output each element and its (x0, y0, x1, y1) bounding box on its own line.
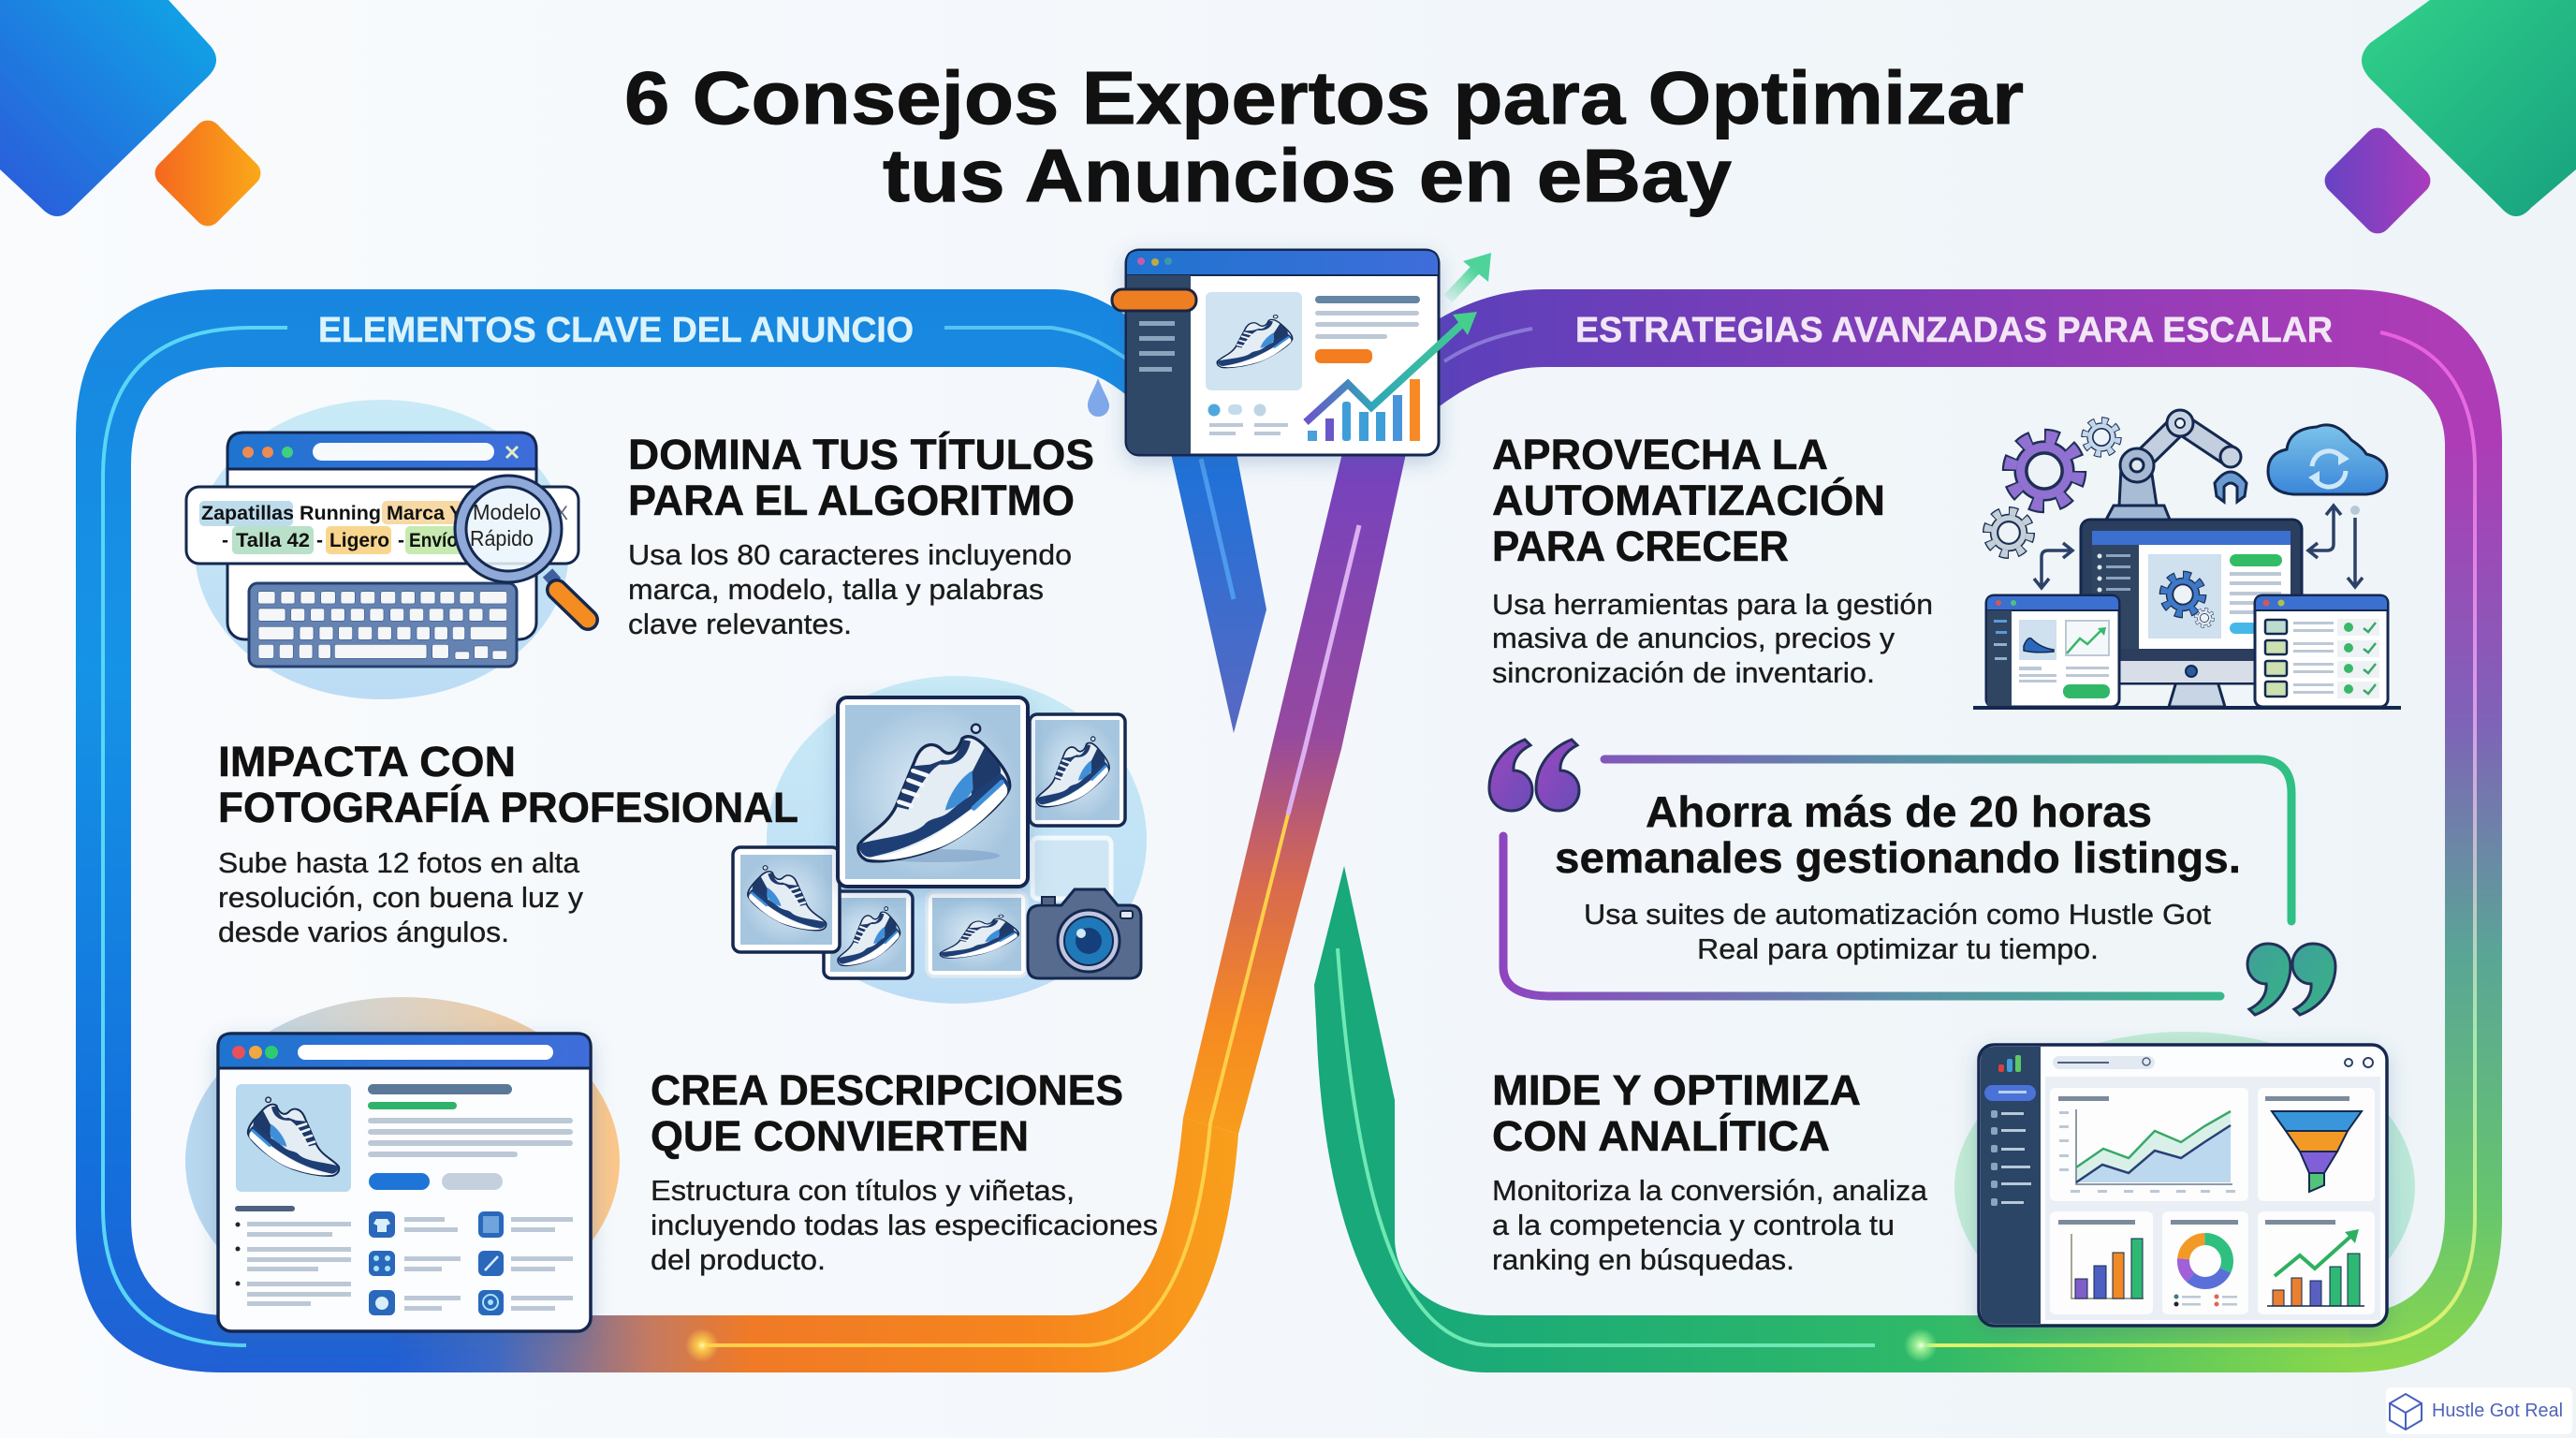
heading (651, 1066, 1123, 1160)
tip 2: photography (218, 676, 1147, 1004)
quote headline: Ahorra más de 20 horas (1646, 787, 2152, 836)
heading (628, 431, 1094, 524)
card: bar chart (2050, 1211, 2153, 1314)
card: donut chart (2162, 1211, 2248, 1314)
heading: CREA DESCRIPCIONES (651, 1066, 1123, 1114)
icon: small light gear (2085, 420, 2118, 454)
title card: Talla 42 (236, 530, 310, 551)
watermark: Hustle Got Real (2386, 1387, 2572, 1434)
icon: opening quote (1489, 740, 1579, 811)
card: funnel (2258, 1088, 2375, 1201)
tip 6: analytics (1492, 1032, 2415, 1343)
icon: camera (1028, 889, 1141, 978)
description (1492, 1174, 1928, 1276)
small window: listing (1986, 595, 2119, 707)
icon: purple gear (2010, 436, 2079, 506)
photo: top right (1030, 714, 1125, 826)
description: del producto. (651, 1243, 826, 1276)
icon: blue drip (1088, 378, 1109, 417)
description (218, 846, 584, 948)
description: marca, modelo, talla y palabras (628, 573, 1044, 606)
description: incluyendo todas las especificaciones (651, 1209, 1158, 1241)
description: resolución, con buena luz y (218, 881, 584, 914)
magnifier: Modelo (473, 500, 541, 524)
heading (1492, 431, 1885, 570)
card: growth chart (2258, 1211, 2375, 1314)
photo: left (733, 847, 840, 952)
description: Usa los 80 caracteres incluyendo (628, 538, 1072, 571)
watermark: Hustle Got Real: Hustle Got Real (2432, 1401, 2563, 1421)
heading: DOMINA TUS TÍTULOS (628, 431, 1094, 478)
title card: X (555, 503, 568, 524)
quote body: Usa suites de automatización como Hustle Got (1584, 898, 2211, 931)
illustration: analytics dashboard (1954, 1032, 2415, 1343)
illustration: robot, gears, cloud and screens (1973, 410, 2401, 710)
small window: inventory checklist (2255, 595, 2388, 707)
illustration: photo collage and camera (733, 676, 1147, 1004)
icon: cloud sync (2268, 425, 2387, 494)
tip 5: quote callout (1489, 740, 2335, 1015)
keyboard (249, 583, 517, 667)
title card: Zapatillas Running Marca (201, 503, 445, 524)
arrow: rising trend (1306, 312, 1477, 422)
product photo (1206, 292, 1302, 390)
photo: bottom two (927, 892, 1027, 976)
heading: IMPACTA CON (218, 738, 516, 785)
photo: bottom one (824, 891, 913, 978)
title (624, 56, 2024, 217)
tip 4: automation (1492, 410, 2401, 710)
bar chart (1308, 379, 1420, 441)
description: clave relevantes. (628, 608, 852, 640)
tip 1: titles (186, 400, 1094, 699)
decoration: purple diamond (2320, 123, 2436, 239)
title: 6 Consejos Expertos para Optimizar (624, 56, 2024, 139)
decoration: orange diamond (150, 115, 266, 231)
icon: closing quote (2247, 944, 2335, 1015)
description: sincronización de inventario. (1492, 656, 1875, 689)
magnifier: Rápido (470, 526, 534, 550)
description: a la competencia y controla tu (1492, 1209, 1895, 1241)
illustration: listing title with keyboard and magnifier (186, 400, 588, 699)
decoration: green diamond top right (2362, 0, 2576, 216)
decoration: blue diamond top left (0, 0, 216, 216)
title card: - (398, 530, 404, 551)
heading: MIDE Y OPTIMIZA (1492, 1066, 1861, 1114)
card: line chart (2050, 1088, 2248, 1201)
heading: PARA CRECER (1492, 522, 1789, 570)
description: ranking en búsquedas. (1492, 1243, 1794, 1276)
ribbon: blue arrow pointing down (1170, 449, 1266, 733)
arrows: data flow (2034, 506, 2363, 588)
magnifier (461, 481, 588, 620)
ribbon: left section loop (76, 289, 1407, 1372)
title card: - (222, 530, 228, 551)
heading: QUE CONVIERTEN (651, 1112, 1029, 1160)
description: Usa herramientas para la gestión (1492, 588, 1933, 621)
description (651, 1174, 1158, 1276)
description: masiva de anuncios, precios y (1492, 622, 1895, 654)
title card: Ligero (329, 530, 389, 551)
quote headline: semanales gestionando listings. (1555, 833, 2241, 882)
description (628, 538, 1072, 640)
title card (186, 487, 578, 564)
description: Monitoriza la conversión, analiza (1492, 1174, 1928, 1207)
quote headline (1555, 787, 2241, 882)
heading: APROVECHA LA (1492, 431, 1828, 478)
heading (1492, 1066, 1861, 1160)
title card: - (316, 530, 323, 551)
heading (218, 738, 798, 831)
orange tab (1112, 289, 1196, 311)
quote frame (1503, 759, 2291, 996)
icon: cube logo (2390, 1394, 2422, 1430)
section heading: left: ELEMENTOS CLAVE DEL ANUNCIO (318, 311, 914, 350)
ribbon: right section loop (1314, 289, 2502, 1372)
heading: FOTOGRAFÍA PROFESIONAL (218, 784, 798, 831)
heading: CON ANALÍTICA (1492, 1112, 1830, 1160)
heading: AUTOMATIZACIÓN (1492, 477, 1885, 524)
ghost frame (1032, 838, 1111, 899)
photo: main shoe (838, 697, 1028, 887)
quote body: Real para optimizar tu tiempo. (1697, 932, 2099, 965)
description: Estructura con títulos y viñetas, (651, 1174, 1075, 1207)
section heading: right: ESTRATEGIAS AVANZADAS PARA ESCALAR (1575, 311, 2333, 350)
title card: Envío (409, 530, 458, 551)
description: desde varios ángulos. (218, 916, 509, 948)
title card: Y (449, 503, 462, 524)
sidebar menu (1984, 1085, 2036, 1206)
title: tus Anuncios en eBay (883, 134, 1733, 217)
spec icons (369, 1211, 504, 1315)
icon: grey gear (1987, 511, 2030, 554)
quote body (1584, 898, 2211, 965)
tip 3: descriptions (185, 997, 1158, 1331)
description: Sube hasta 12 fotos en alta (218, 846, 580, 879)
central browser window with growth chart (1112, 250, 1477, 455)
monitor (2081, 520, 2302, 707)
illustration: product page (185, 997, 620, 1331)
arrow: green faded (1448, 253, 1491, 299)
heading: PARA EL ALGORITMO (628, 477, 1075, 524)
robot arm (2106, 410, 2247, 520)
product photo (236, 1084, 351, 1192)
description (1492, 588, 1933, 689)
